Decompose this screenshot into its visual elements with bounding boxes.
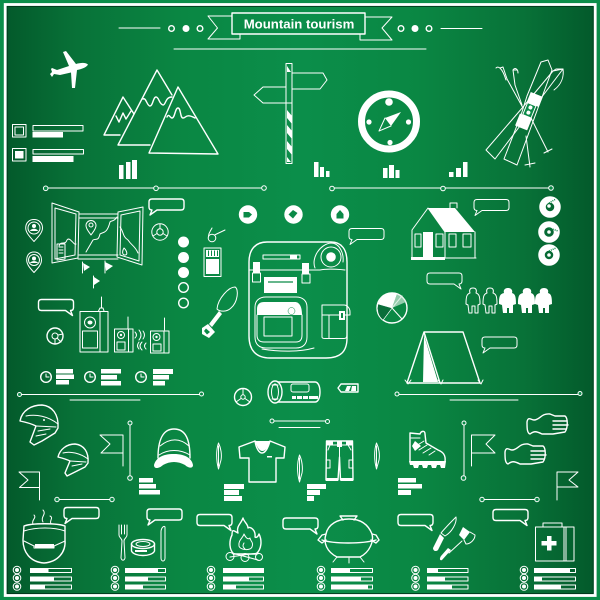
icon: divider leaf (375, 443, 379, 469)
ribbon right tail (360, 17, 392, 40)
bar chart: mountains (119, 160, 137, 179)
horizontal connector (55, 497, 114, 502)
speech bubble: tools (398, 514, 433, 530)
icon: divider leaf (217, 443, 221, 469)
vertical connector (461, 421, 466, 480)
icon: glove (505, 444, 546, 464)
icon: glove (527, 414, 568, 434)
donut chart: radios (47, 328, 63, 344)
icon: fork (119, 525, 127, 560)
icon: signpost (254, 64, 327, 164)
stacked bars: cap (139, 478, 160, 494)
speech bubble: first aid (493, 510, 528, 526)
icon: flag (19, 472, 40, 500)
title: Mountain tourism (244, 16, 354, 32)
icon buttons (239, 205, 349, 224)
progress dots (178, 236, 189, 308)
ribbon left tail (208, 16, 240, 39)
speech bubble: grill (283, 518, 318, 534)
divider: top right (330, 186, 553, 191)
bars: pot (13, 566, 71, 590)
icon: tent (405, 332, 483, 384)
bar chart: signpost (314, 162, 330, 177)
speech bubble: radios (38, 300, 74, 316)
icon: t-shirt (239, 441, 285, 482)
donut chart: map (152, 224, 168, 240)
icon: map (52, 203, 143, 265)
icon: flag (557, 472, 578, 500)
bars: bowl (111, 566, 166, 590)
icon: location pins (26, 220, 42, 272)
icon: radios (80, 297, 169, 353)
icon: bowl (132, 540, 154, 556)
ribbon center (232, 13, 365, 34)
stacked bars: trousers (307, 484, 326, 501)
icon: small helmet (58, 444, 88, 476)
speech bubble: bowl (147, 509, 182, 525)
divider: middle left (18, 392, 204, 400)
icon: mountains (104, 70, 218, 154)
icons: people (466, 288, 552, 313)
icon: large helmet (20, 405, 58, 445)
icon: match (208, 228, 225, 242)
bars: tools (412, 566, 468, 590)
icon: matchbox (204, 248, 221, 276)
stacked bars: t-shirt (224, 484, 244, 501)
speech bubble: people (427, 273, 462, 289)
pie chart (377, 293, 407, 323)
divider: center (270, 419, 330, 428)
icon: house (411, 203, 476, 260)
vertical connector (128, 421, 132, 480)
bars: grill (317, 566, 372, 590)
icon: trousers (326, 441, 353, 481)
icon: table knife (161, 526, 165, 561)
divider: top left (43, 186, 266, 191)
legend list (12, 124, 84, 162)
icon: flag (100, 435, 123, 466)
icon: battery (338, 384, 358, 392)
icon: campfire (226, 518, 262, 562)
icon: compass (362, 94, 416, 149)
speech bubble: house (474, 200, 509, 216)
icon: knife and axe (433, 517, 475, 560)
icons: map flags (82, 261, 113, 288)
bar chart: compass (383, 165, 400, 178)
icon: skis and poles (486, 60, 563, 167)
icon: flag (472, 435, 495, 466)
icon: airplane (50, 51, 88, 88)
speech bubble: pot (64, 508, 99, 524)
icon: grill (318, 516, 379, 563)
bar chart: skis left (449, 162, 468, 177)
stacked bars: boot (398, 478, 422, 495)
divider: middle right (395, 392, 582, 400)
title banner (208, 13, 392, 40)
icon: hiking boot (409, 431, 446, 468)
stats row: radios (41, 369, 173, 386)
horizontal connector (480, 497, 539, 502)
icon: shovel (202, 287, 237, 338)
icon: flashlight (268, 381, 320, 403)
speech bubble: campfire (197, 514, 232, 530)
icon: cooking pot (23, 510, 65, 563)
bars: first aid (520, 566, 576, 590)
icon: divider leaf (298, 455, 302, 482)
speech bubble: map (149, 199, 184, 215)
title ornaments (119, 25, 482, 49)
speech bubble: tent (482, 337, 517, 353)
icon: backpack (249, 242, 350, 358)
icon: cap (154, 429, 193, 468)
bars: campfire (207, 566, 264, 590)
icon: first aid kit (536, 523, 574, 561)
donut charts: house (541, 199, 558, 262)
speech bubble: backpack (349, 228, 384, 244)
icon: compass wheel (234, 388, 252, 406)
